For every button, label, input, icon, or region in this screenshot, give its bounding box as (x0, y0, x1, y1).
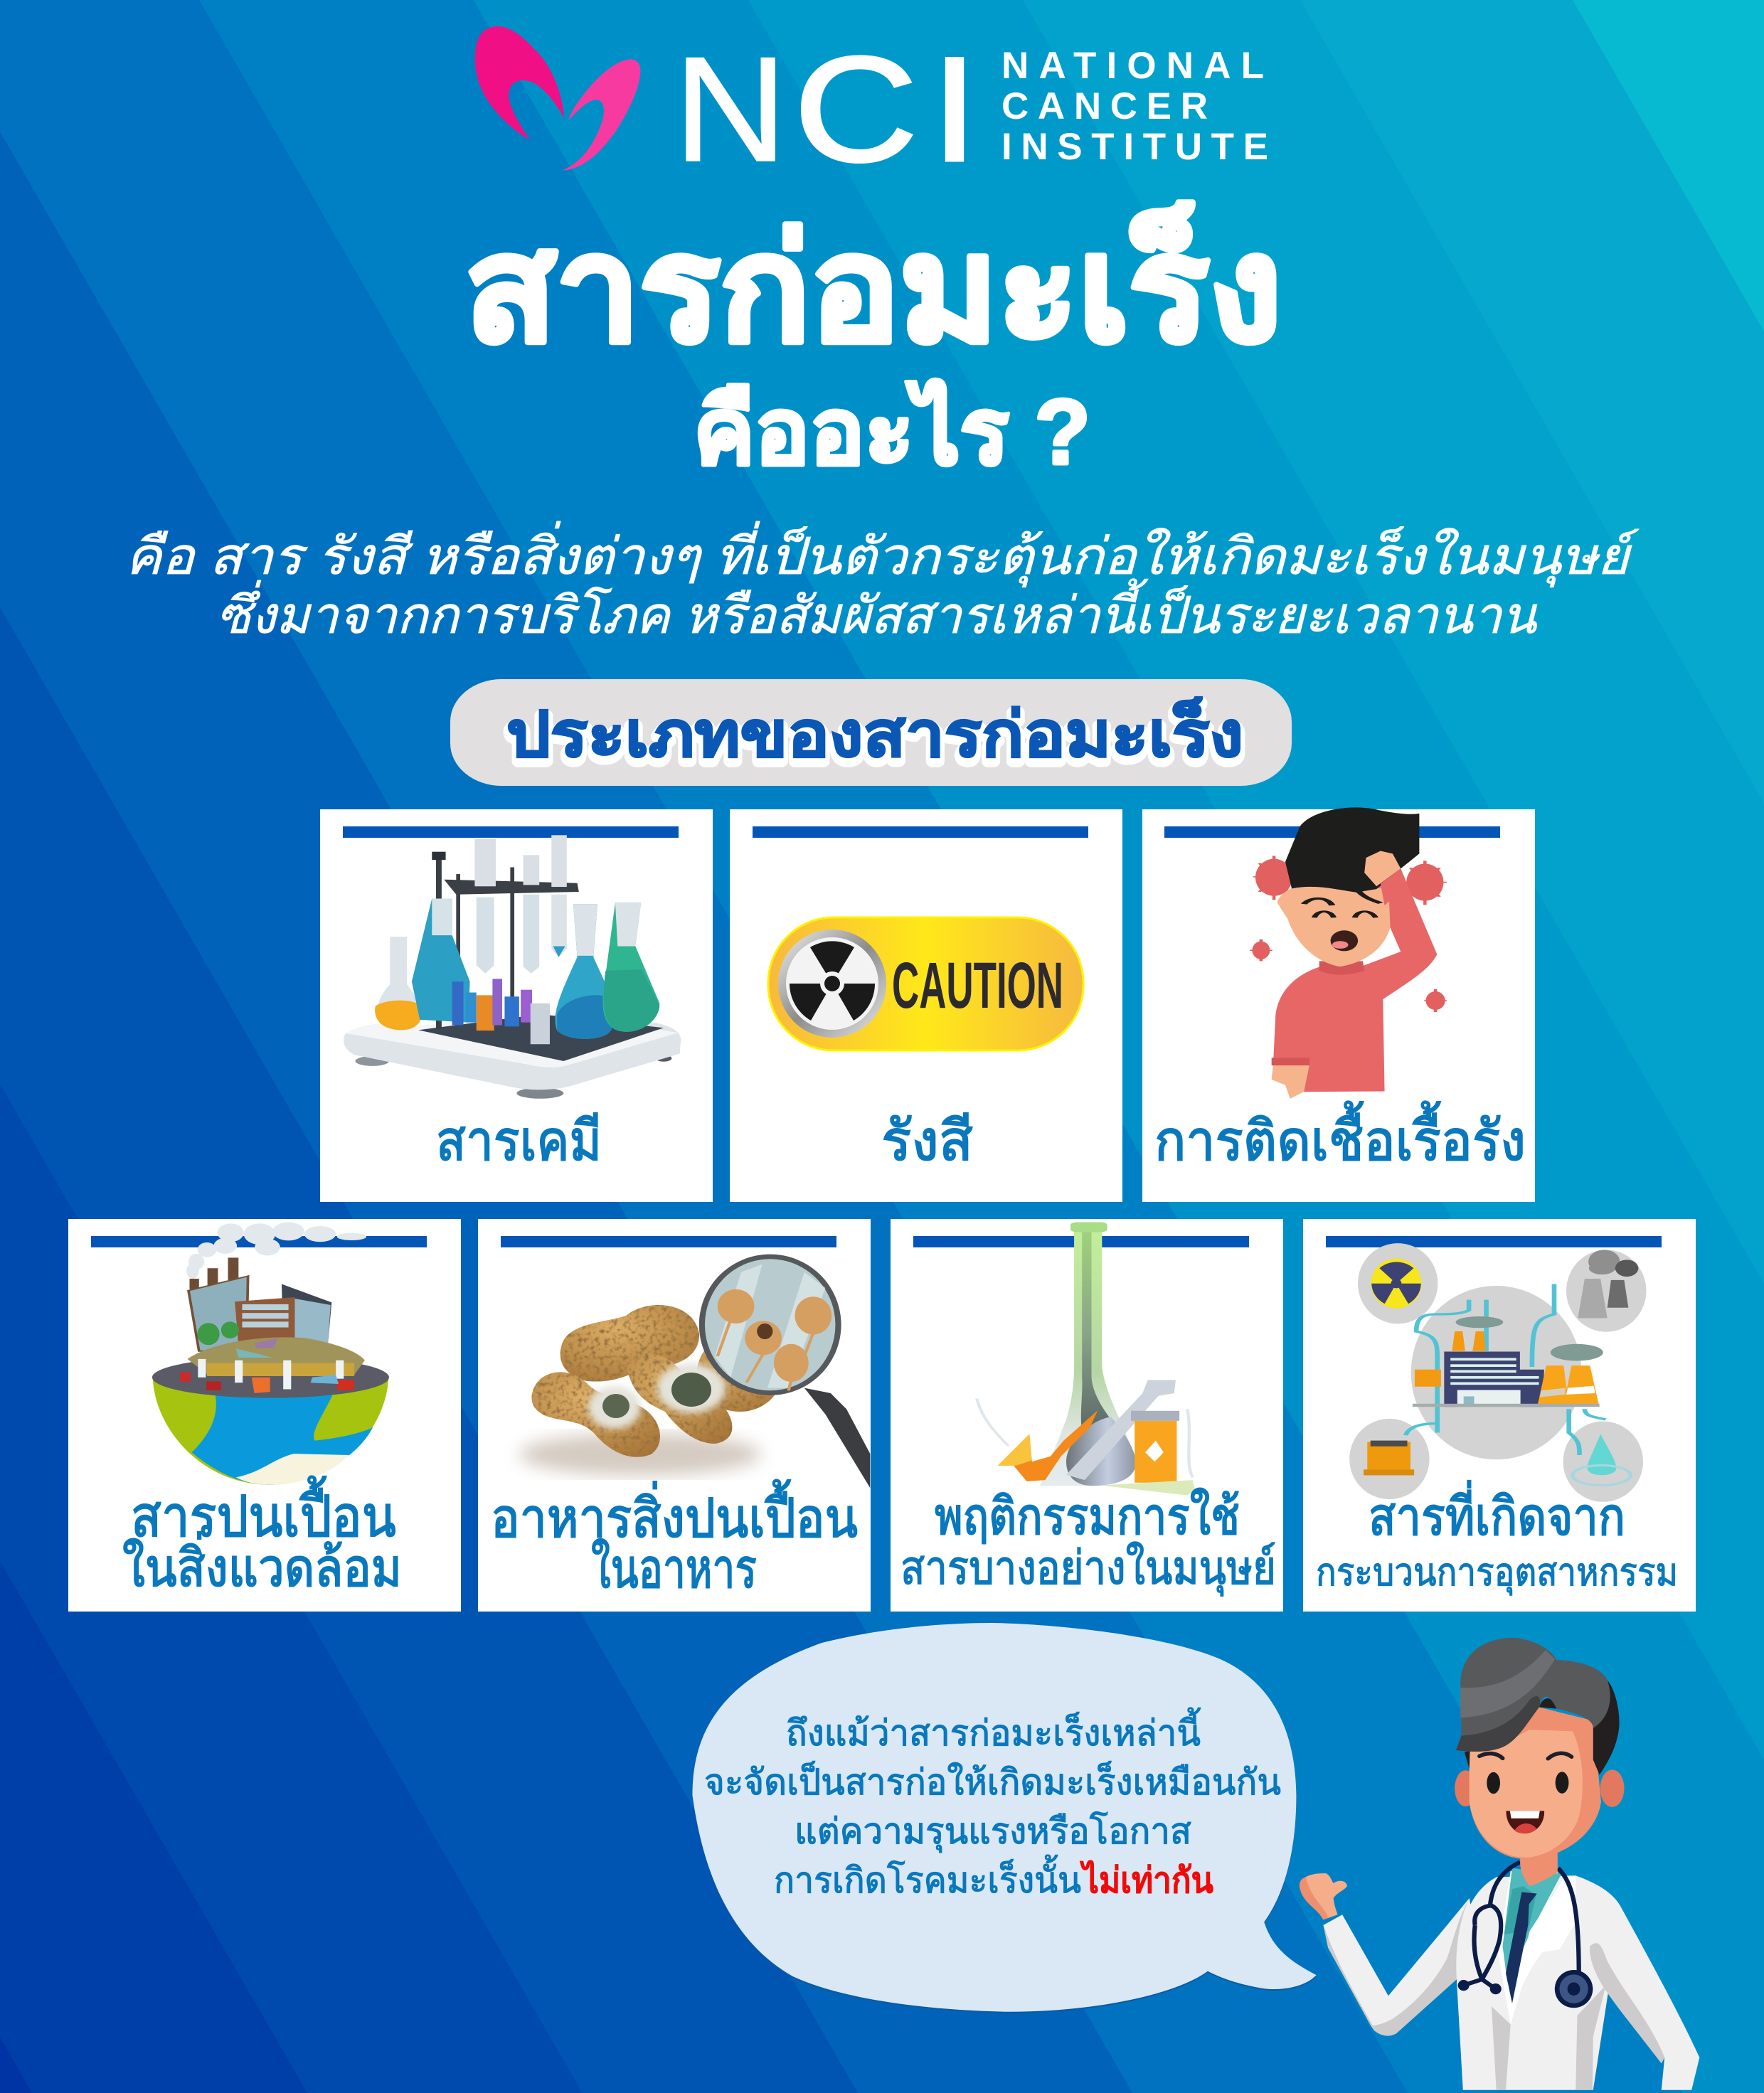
panel: environmental pollutants: ในสิ่งแวดล้อม (122, 1531, 402, 1597)
panel: environmental pollutants (68, 1219, 461, 1612)
stethoscope (1464, 1862, 1579, 1988)
callout text: ถึงแม้ว่าสารก่อมะเร็งเหล่านี้ (786, 1708, 1201, 1753)
panel: chronic infection (1142, 807, 1535, 1202)
callout text: การเกิดโรคมะเร็งนั้น (774, 1855, 1081, 1900)
shirt, lapels and tie (1498, 1868, 1576, 2025)
icon: moldy peanuts under magnifier (519, 1305, 782, 1476)
panel: behaviours and substance use (891, 1219, 1283, 1612)
panel: industrial processes: กระบวนการอุตสาหกรรม (1316, 1551, 1678, 1596)
label: chronic infection: การติดเชื้อเรื้อรัง (1154, 1101, 1526, 1172)
speech bubble callout (692, 1623, 1317, 2013)
NCI wordmark: C (794, 26, 918, 193)
subtitle question: คืออะไร ? (694, 379, 1090, 484)
callout text: ไม่เท่ากัน (1079, 1860, 1213, 1900)
icon: magnifying glass (699, 1255, 870, 1488)
label: industrial processes: สารที่เกิดจาก (1369, 1480, 1625, 1546)
definition text: ซึ่งมาจากการบริโภค หรือสัมผัสสารเหล่านี้เป็นระยะเวลานาน (216, 578, 1538, 644)
doctor character (1300, 1638, 1699, 2090)
title: สารก่อมะเร็ง (465, 202, 1282, 371)
callout text: จะจัดเป็นสารก่อให้เกิดมะเร็งเหมือนกัน (704, 1761, 1281, 1802)
institute name: CANCER (1001, 85, 1208, 127)
icon: glass flask with substances (977, 1222, 1195, 1496)
panel: behaviours and substance use: สารบางอย่างในมนุษย์ (900, 1541, 1276, 1597)
panel: contaminated food (478, 1219, 871, 1612)
NCI wordmark: N (674, 26, 787, 193)
institute name: NATIONAL (1001, 45, 1264, 87)
icon: caution radiation badge (768, 917, 1083, 1050)
NCI wordmark: I (930, 26, 979, 193)
panel: contaminated food: ในอาหาร (591, 1538, 757, 1599)
label: contaminated food: อาหารสิ่งปนเปื้อน (491, 1479, 858, 1549)
icon: sick boy with viruses (1250, 807, 1447, 1099)
icon: industrial factory with pipes (1349, 1243, 1646, 1502)
definition text: คือ สาร รังสี หรือสิ่งต่างๆ ที่เป็นตัวกระตุ้นก่อให้เกิดมะเร็งในมนุษย์ (125, 521, 1640, 587)
coat and arms (1323, 1875, 1699, 2090)
neck, ears and face (1455, 1707, 1625, 1886)
icon: pink ribbon wings (475, 26, 640, 171)
thumbs-up hand (1300, 1873, 1347, 1919)
heading pill: types of carcinogens: ประเภทของสารก่อมะเร็ง (506, 701, 1243, 774)
heading pill: types of carcinogens (450, 679, 1292, 786)
institute name: INSTITUTE (1001, 126, 1268, 168)
panel: industrial processes (1303, 1219, 1696, 1612)
label: chemicals: สารเคมี (436, 1109, 602, 1172)
label: behaviours: พฤติกรรมการใช้ (935, 1488, 1240, 1545)
definition text (125, 521, 1640, 644)
callout text: แต่ความรุนแรงหรือโอกาส (795, 1811, 1191, 1853)
label: radiation: รังสี (881, 1109, 973, 1172)
heading pill: types of carcinogens: ประเภทของสารก่อมะเร็ง (506, 696, 1243, 769)
hair (1456, 1638, 1620, 1775)
callout text (704, 1708, 1281, 1900)
icon: lab glassware on tray (344, 835, 681, 1099)
panel: radiation (730, 809, 1122, 1202)
institute name (1001, 45, 1268, 168)
panel: chemicals (320, 809, 713, 1202)
icon: caution radiation badge: CAUTION (892, 949, 1063, 1022)
logo: NCI National Cancer Institute (475, 26, 1268, 193)
NCI wordmark (674, 26, 979, 193)
icon: polluted earth with factory (152, 1222, 389, 1485)
label: environmental pollutants: สารปนเปื้อน (131, 1476, 396, 1548)
